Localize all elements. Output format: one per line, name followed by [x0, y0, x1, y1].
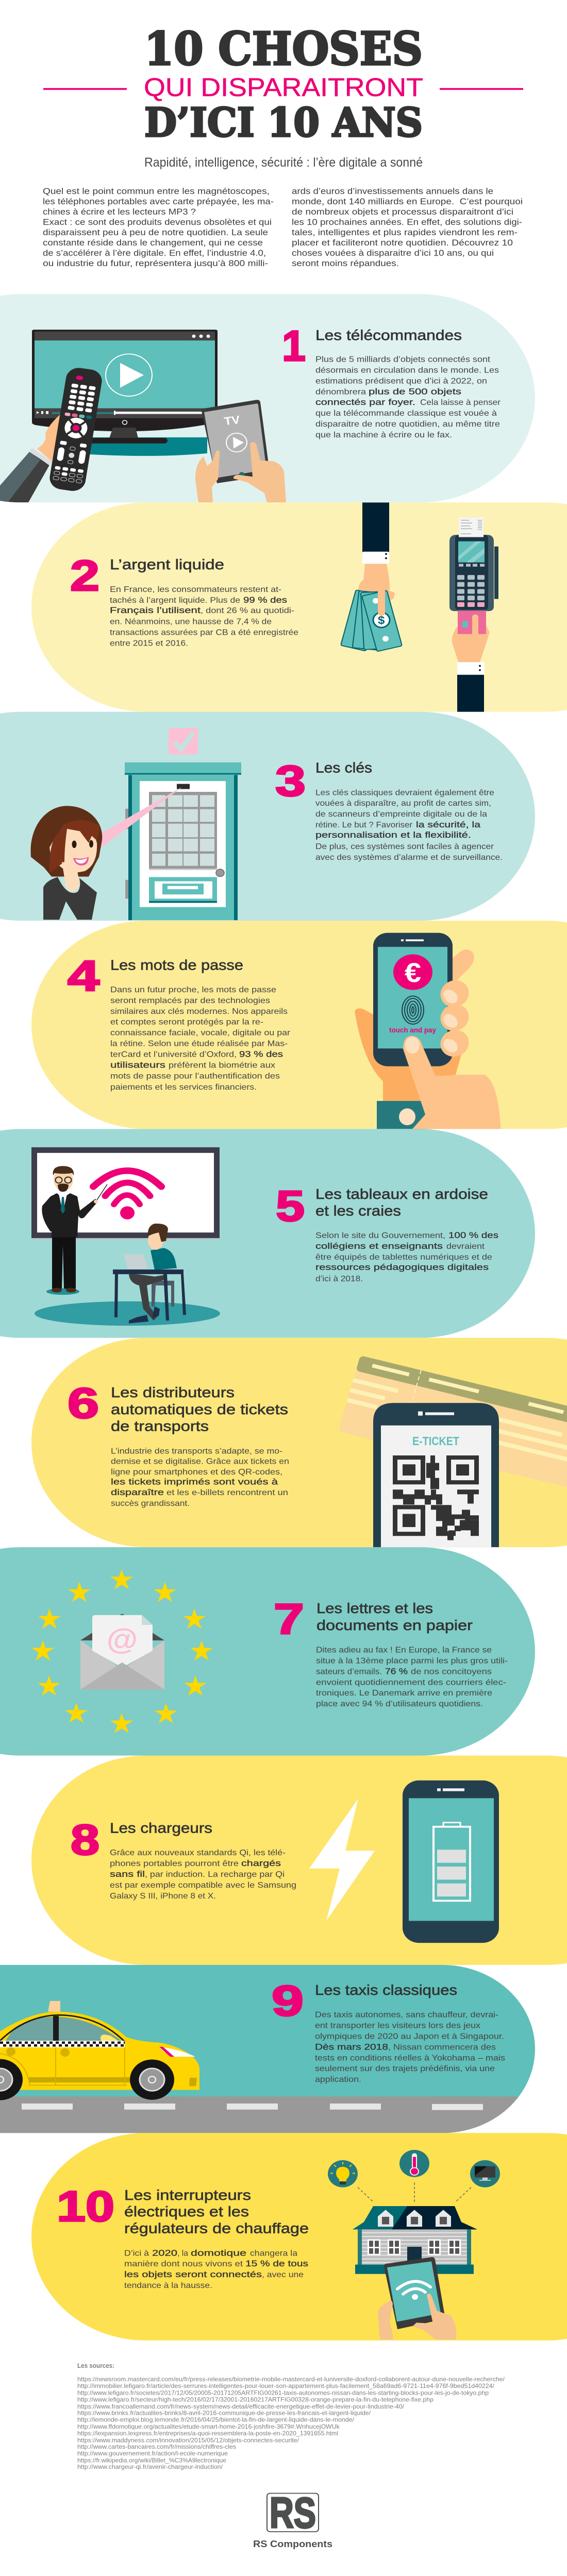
footer: sources and logo	[77, 2362, 505, 2549]
panel 3: clés	[0, 712, 535, 921]
body text 2	[110, 585, 298, 648]
icon: phone with battery	[403, 1781, 499, 1943]
icon: envelope	[80, 1614, 164, 1689]
body text 10: changera la	[250, 2248, 298, 2258]
body text 4	[110, 985, 290, 1092]
icon: payment terminal with card	[449, 517, 498, 712]
icon: house	[353, 2206, 477, 2274]
sources: http://www.lefigaro.fr/secteur/high-tech/2016/02/17/32001-20160217ARTFIG00328-orange-prepare-la-fin-du-telephone-fixe.php	[77, 2396, 433, 2403]
title line 1: 10 CHOSES	[144, 22, 423, 75]
icon: tablet with hands	[195, 400, 286, 502]
illustration: email and EU stars	[31, 1569, 213, 1733]
floor ellipse	[35, 1301, 220, 1326]
intro text: les 10 prochaines années. En effet, des solutions digi-	[292, 217, 522, 227]
body text 8: phones portables pourront être	[110, 1859, 239, 1868]
illustration: e-ticket	[338, 1355, 567, 1547]
icon: check mark	[169, 728, 198, 754]
number 9: 9	[272, 1976, 304, 2025]
body text 9: , Nissan commencera des	[388, 2042, 496, 2052]
body text 6: ligne pour smartphones et des QR-codes,	[111, 1467, 282, 1477]
body text 8: sans fil	[110, 1869, 145, 1879]
body text 9	[315, 2010, 505, 2084]
body text 10: tendance à la hausse.	[124, 2281, 212, 2290]
intro text: Exact : ce sont des produits devenus obsolètes et qui	[43, 217, 272, 227]
body text 6: et les e-billets rencontrent un	[166, 1488, 288, 1497]
illustration: cash and card payment	[341, 502, 498, 712]
icon: taxi	[0, 2001, 199, 2100]
body text 3	[315, 788, 503, 862]
sources: Les sources:	[77, 2362, 114, 2369]
body text 2: entre 2015 et 2016.	[110, 638, 188, 648]
body text 4: et comptes seront protégés par la re-	[110, 1017, 263, 1027]
body text 7: sateurs d’emails.	[316, 1667, 382, 1676]
body text 3: vouées à disparaître, au profit de cartes sim,	[315, 799, 491, 808]
body text 2: 99 % des	[243, 595, 287, 605]
body text 10: les objets seront connectés	[124, 2269, 262, 2279]
body text 8: Grâce aux nouveaux standards Qi, les télé-	[110, 1848, 286, 1857]
body text 5: 100 % des	[448, 1230, 498, 1240]
intro text: les téléphones portables avec carte prépayée, les ma-	[43, 196, 274, 206]
icon: monitor	[470, 2160, 500, 2188]
icon: front fingers	[403, 976, 501, 1129]
icon: phone with QR code	[373, 1403, 499, 1547]
intro text: placer et faciliteront notre quotidien. Découvrez 10	[292, 238, 513, 247]
body text 5: devraient	[446, 1242, 485, 1251]
body text 6: succès grandissant.	[111, 1499, 190, 1508]
icon: door	[125, 762, 241, 920]
logo: RS Components: RS	[270, 2488, 316, 2537]
sources: https://newsroom.mastercard.com/eu/fr/press-releases/biometrie-mobile-mastercard-et-luniversite-doxford-collaborent-autour-dune-nouvelle-recherche/	[77, 2376, 505, 2383]
number 8: 8	[71, 1815, 99, 1863]
body text 2: en. Néanmoins, une hausse de 7,4 % de	[110, 617, 272, 626]
intro text: tales, intelligentes et plus rapides viendront les rem-	[292, 227, 518, 237]
heading 6: automatiques de tickets	[111, 1401, 288, 1418]
body text 8: , par induction. La recharge par Qi	[145, 1870, 285, 1879]
QR code	[393, 1455, 479, 1540]
heading 5	[315, 1186, 488, 1219]
body text 1	[315, 354, 501, 439]
heading 5: et les craies	[315, 1203, 401, 1219]
body text 5: d’ici à 2018.	[315, 1274, 363, 1283]
icon: wifi	[93, 1171, 161, 1219]
body text 3: la sécurité, la	[416, 820, 480, 829]
sources: http://lemonde-emploi.blog.lemonde.fr/2016/04/25/bientot-la-fin-de-largent-liquide-dans-le-monde/	[77, 2416, 355, 2423]
intro text: ards d’euros d’investissements annuels dans le	[292, 186, 493, 196]
body text 1: Cela laisse à penser	[420, 398, 501, 407]
sources: http://www.lefigaro.fr/societes/2017/12/05/20005-20171205ARTFIG00261-taxis-autonomes-nissan-dans-les-starting-blocks-pour-les-jo-de-tokyo.php	[77, 2389, 489, 2396]
intro text: choses vouées à disparaitre d’ici 10 ans, ou qui	[292, 248, 494, 258]
heading 10: électriques et les	[124, 2204, 249, 2220]
number 7: 7	[274, 1595, 304, 1643]
heading 7	[316, 1601, 473, 1634]
panel 10: interrupteurs	[31, 2133, 567, 2341]
heading 1: Les télécommandes	[315, 327, 462, 344]
body text 1: que la machine à écrire ou le fax.	[315, 430, 452, 439]
body text 4: paiements et les services financiers.	[110, 1082, 257, 1092]
body text 5: être équipés de tablettes numériques et de	[315, 1252, 492, 1262]
icon: smartphone: touch and pay	[389, 1027, 436, 1035]
body text 10: 2020	[152, 2248, 177, 2258]
sources: https://lexpansion.lexpress.fr/entreprises/a-quoi-ressemblera-la-poste-en-2020_1391655.html	[77, 2430, 338, 2436]
panel 4: mots de passe	[31, 921, 567, 1129]
intro text: de s’accélérer à l’ère digitale. En effet, l’industrie 4.0,	[43, 248, 266, 258]
body text 1: disparaitre de notre quotidien, au même titre	[315, 419, 500, 429]
body text 8: Galaxy S III, iPhone 8 et X.	[110, 1891, 216, 1901]
intro text: Quel est le point commun entre les magnétoscopes,	[43, 186, 270, 196]
body text 3: de scanneurs d’empreinte digitale ou de la	[315, 809, 488, 819]
icon: television	[32, 330, 218, 444]
body text 9: application.	[315, 2075, 361, 2084]
icon: paper ticket	[338, 1355, 567, 1495]
icon: envelope: @	[107, 1623, 138, 1656]
illustration: door with retina scanner	[31, 728, 241, 920]
body text 4: utilisateurs	[110, 1060, 165, 1070]
body text 9: olympiques de 2020 au Japon et à Singapour.	[315, 2031, 504, 2041]
body text 4: terCard et l’université d’Oxford,	[110, 1049, 237, 1059]
body text 5: collégiens et enseignants	[315, 1241, 443, 1251]
body text 10	[124, 2248, 308, 2290]
body text 9: ent transporter les visiteurs lors des jeux	[315, 2021, 481, 2030]
icon: teacher	[42, 1166, 107, 1295]
icon: smartphone: €	[405, 957, 421, 988]
icon: lightning bolt	[309, 1799, 375, 1921]
illustration: wireless charging	[309, 1781, 499, 1943]
body text 5: ressources pédagogiques digitales	[315, 1262, 489, 1272]
body text 4: Dans un futur proche, les mots de passe	[110, 985, 276, 994]
body text 10: manière dont nous vivons et	[124, 2259, 243, 2268]
body text 10: , la	[177, 2248, 189, 2258]
icon: smart board	[31, 1147, 221, 1240]
heading 5: Les tableaux en ardoise	[315, 1186, 488, 1202]
body text 7: 76 %	[385, 1666, 408, 1676]
body text 10: , avec une	[262, 2270, 304, 2279]
logo: RS Components: RS Components	[253, 2539, 332, 2549]
body text 6: L’industrie des transports s’adapte, se mo-	[111, 1446, 282, 1455]
body text 7: place avec 94 % d’utilisateurs quotidiens.	[316, 1699, 483, 1708]
sources: http://www.gouvernement.fr/action/l-ecole-numerique	[77, 2450, 228, 2456]
body text 3: personnalisation et la flexibilité.	[315, 830, 471, 840]
floor shadow	[87, 437, 207, 456]
icon: scanner beam	[99, 787, 182, 849]
body text 9: Des taxis autonomes, sans chauffeur, devrai-	[315, 2010, 498, 2019]
body text 1: plus de 500 objets	[369, 386, 461, 396]
panel 1: télécommandes	[0, 294, 535, 502]
body text 2: transactions assurées par CB a été enregistrée	[110, 628, 298, 637]
icon: woman	[31, 806, 102, 920]
body text 1: que la télécommande classique est vouée à	[315, 409, 497, 418]
number 6: 6	[68, 1379, 99, 1427]
intro text: chines à écrire et les lecteurs MP3 ?	[43, 207, 196, 216]
body text 1: désormais en circulation dans le monde. Les	[315, 365, 499, 375]
icon: remote	[48, 366, 104, 493]
body text 10: D’ici à	[124, 2248, 149, 2258]
body text 6: les tickets imprimés sont voués à	[111, 1477, 278, 1486]
icon: road	[0, 2096, 541, 2134]
heading 10	[124, 2187, 309, 2236]
body text 3: De plus, ces systèmes sont faciles à agencer	[315, 842, 494, 851]
icon: sleeve	[377, 1101, 431, 1129]
body text 1: connectés par foyer.	[315, 397, 415, 407]
body text 3: Les clés classiques devraient également être	[315, 788, 494, 797]
subtitle: Rapidité, intelligence, sécurité : l’ère digitale a sonné	[144, 156, 423, 170]
body text 8: chargés	[241, 1858, 281, 1868]
icon: phone with QR code: E-TICKET	[412, 1435, 459, 1448]
sources: http://www.cartes-bancaires.com/fr/missions/chiffres-cles	[77, 2443, 236, 2450]
body text 2: tachés à l’argent liquide. Plus de	[110, 596, 240, 605]
sources: http://www.ffdomotique.org/actualites/etude-smart-home-2016-joshfire-3679#.WnhucejOWUk	[77, 2423, 340, 2430]
icon: thermometer	[399, 2150, 429, 2177]
body text 4: la rétine. Selon une étude réalisée par Mas-	[110, 1039, 288, 1048]
illustration: classroom	[31, 1147, 221, 1326]
panel 9: taxis	[0, 1965, 541, 2134]
panel 7: lettres et documents	[0, 1547, 535, 1756]
heading 8: Les chargeurs	[110, 1820, 212, 1836]
body text 3: rétine. Le but ? Favoriser	[315, 820, 412, 829]
number 1: 1	[282, 321, 306, 370]
icon: tablet with wifi and hands	[378, 2257, 456, 2340]
sources: https://www.francoallemand.com/fr/news-system/news-detail/efficacite-energetique-effet-de-levier-pour-lindustrie-40/	[77, 2403, 405, 2410]
sources: http://immobilier.lefigaro.fr/article/des-serrures-intelligentes-pour-louer-son-appartement-plus-facilement_58a69ad6-9721-11e4-976f-9bed51d40224/	[77, 2382, 495, 2389]
intro text: constante réside dans le changement, qui ne cesse	[43, 238, 263, 247]
title line 3: D’ICI 10 ANS	[144, 99, 423, 146]
body text 4: préfèrent la biométrie aux	[169, 1060, 276, 1070]
number 4: 4	[68, 951, 99, 999]
body text 7: de nos concitoyens	[411, 1667, 492, 1676]
body text 5: Selon le site du Gouvernement,	[315, 1231, 445, 1240]
icon: tablet with hands: TV	[223, 413, 241, 428]
title block	[43, 22, 523, 146]
number 5: 5	[276, 1181, 305, 1230]
body text 1: Plus de 5 milliards d’objets connectés sont	[315, 354, 490, 364]
intro text: monde, dont 140 milliards en Europe. C’est pourquoi	[292, 196, 523, 206]
intro text: de nombreux objets et processus disparaitront d’ici	[292, 207, 513, 216]
body text 9: tests en conditions réelles à Yokohama – mais	[315, 2053, 505, 2062]
intro text	[43, 186, 523, 268]
illustration: TV with remote and tablet	[0, 330, 286, 502]
number 3: 3	[275, 756, 306, 805]
panel 5: tableaux	[0, 1129, 535, 1338]
body text 8: est par exemple compatible avec le Samsung	[110, 1880, 296, 1890]
sources	[77, 2362, 505, 2470]
body text 2: , dont 26 % au quotidi-	[201, 606, 294, 615]
illustration: smart home	[328, 2150, 500, 2340]
body text 2: En France, les consommateurs restent at-	[110, 585, 281, 594]
body text 9: Dès mars 2018	[315, 2042, 388, 2052]
body text 4: 93 % des	[239, 1049, 283, 1059]
title line 2: QUI DISPARAITRONT	[144, 73, 423, 102]
panel 6: distributeurs de tickets	[31, 1338, 567, 1547]
body text 3: avec des systèmes d’alarme et de surveillance.	[315, 853, 503, 862]
heading 6: Les distributeurs	[111, 1385, 235, 1401]
body text 4: similaires aux clés modernes. Nos appareils	[110, 1007, 288, 1016]
icon: student at desk	[113, 1224, 186, 1324]
panel 8: chargeurs	[31, 1756, 567, 1965]
body text 5	[315, 1230, 498, 1283]
heading 6: de transports	[111, 1418, 209, 1434]
icon: sleeve	[0, 452, 49, 502]
heading 3: Les clés	[315, 760, 372, 776]
heading 9: Les taxis classiques	[315, 1982, 457, 1998]
body text 1: dénombrera	[315, 387, 366, 396]
icon: EU stars	[31, 1569, 213, 1733]
body text 7: envoient quotidiennement des courriers élec-	[316, 1677, 506, 1687]
icon: arm with cash	[341, 502, 402, 652]
body text 6	[111, 1446, 289, 1508]
body text 9: seulement sur des trajets prédéfinis, via une	[315, 2064, 495, 2073]
body text 4: mots de passe pour l’authentification des	[110, 1071, 280, 1080]
number 10: 10	[57, 2182, 114, 2230]
body text 7	[316, 1645, 508, 1708]
sources: https://fr.wikipedia.org/wiki/Billet_%C3%A9lectronique	[77, 2457, 226, 2464]
icon: top finger	[453, 949, 474, 981]
sources: https://www.maddyness.com/innovation/2015/05/12/objets-connectes-securite/	[77, 2437, 299, 2444]
intro text: seront moins répandues.	[292, 258, 399, 268]
sources: https://www.brinks.fr/actualites-brinks/8-avril-2016-communique-de-presse-les-francais-et-largent-liquide/	[77, 2410, 371, 2416]
illustration: taxi on road	[0, 2001, 541, 2134]
body text 1: estimations prédisent que d’ici à 2022, on	[315, 376, 487, 385]
body text 8	[110, 1848, 296, 1901]
body text 6: disparaître	[111, 1487, 164, 1497]
icon: smartphone	[373, 933, 453, 1066]
intro text: ou industrie du futur, représentera jusqu’à 800 milli-	[43, 258, 268, 268]
logo: RS Components	[253, 2488, 332, 2549]
heading 6	[111, 1385, 288, 1434]
body text 7: troniques. Le Danemark arrive en première	[316, 1688, 492, 1698]
heading 10: régulateurs de chauffage	[124, 2221, 309, 2236]
heading 4: Les mots de passe	[110, 957, 243, 973]
body text 7: Dites adieu au fax ! En Europe, la France se	[316, 1645, 492, 1654]
heading 7: documents en papier	[316, 1617, 473, 1634]
heading 7: Les lettres et les	[316, 1601, 433, 1617]
body text 4: connaissance faciale, vocale, digitale ou par	[110, 1028, 290, 1037]
body text 10: domotique	[191, 2248, 246, 2258]
icon: arm with cash: $	[378, 614, 385, 626]
panel 2: argent liquide	[31, 502, 567, 712]
body text 10: 15 % de tous	[245, 2259, 308, 2268]
icon: hand holding remote	[37, 414, 60, 462]
body text 7: situe à la 13ème place parmi les plus gros utili-	[316, 1656, 508, 1665]
icon: light bulb	[328, 2160, 358, 2188]
heading 10: Les interrupteurs	[124, 2187, 251, 2204]
number 2: 2	[70, 551, 99, 600]
body text 2: Français l’utilisent	[110, 605, 201, 615]
sources: http://www.chargeur-qi.fr/avenir-chargeur-induction/	[77, 2463, 223, 2470]
heading 2: L’argent liquide	[110, 557, 224, 573]
body text 4: seront remplacés par des technologies	[110, 996, 270, 1005]
illustration: phone with fingerprint	[355, 933, 501, 1129]
body text 6: dernise et se digitalise. Grâce aux tickets en	[111, 1456, 289, 1466]
icon: back of hand	[355, 1008, 464, 1101]
intro text: disparaissent peu à peu de notre quotidien. La seule	[43, 227, 268, 237]
